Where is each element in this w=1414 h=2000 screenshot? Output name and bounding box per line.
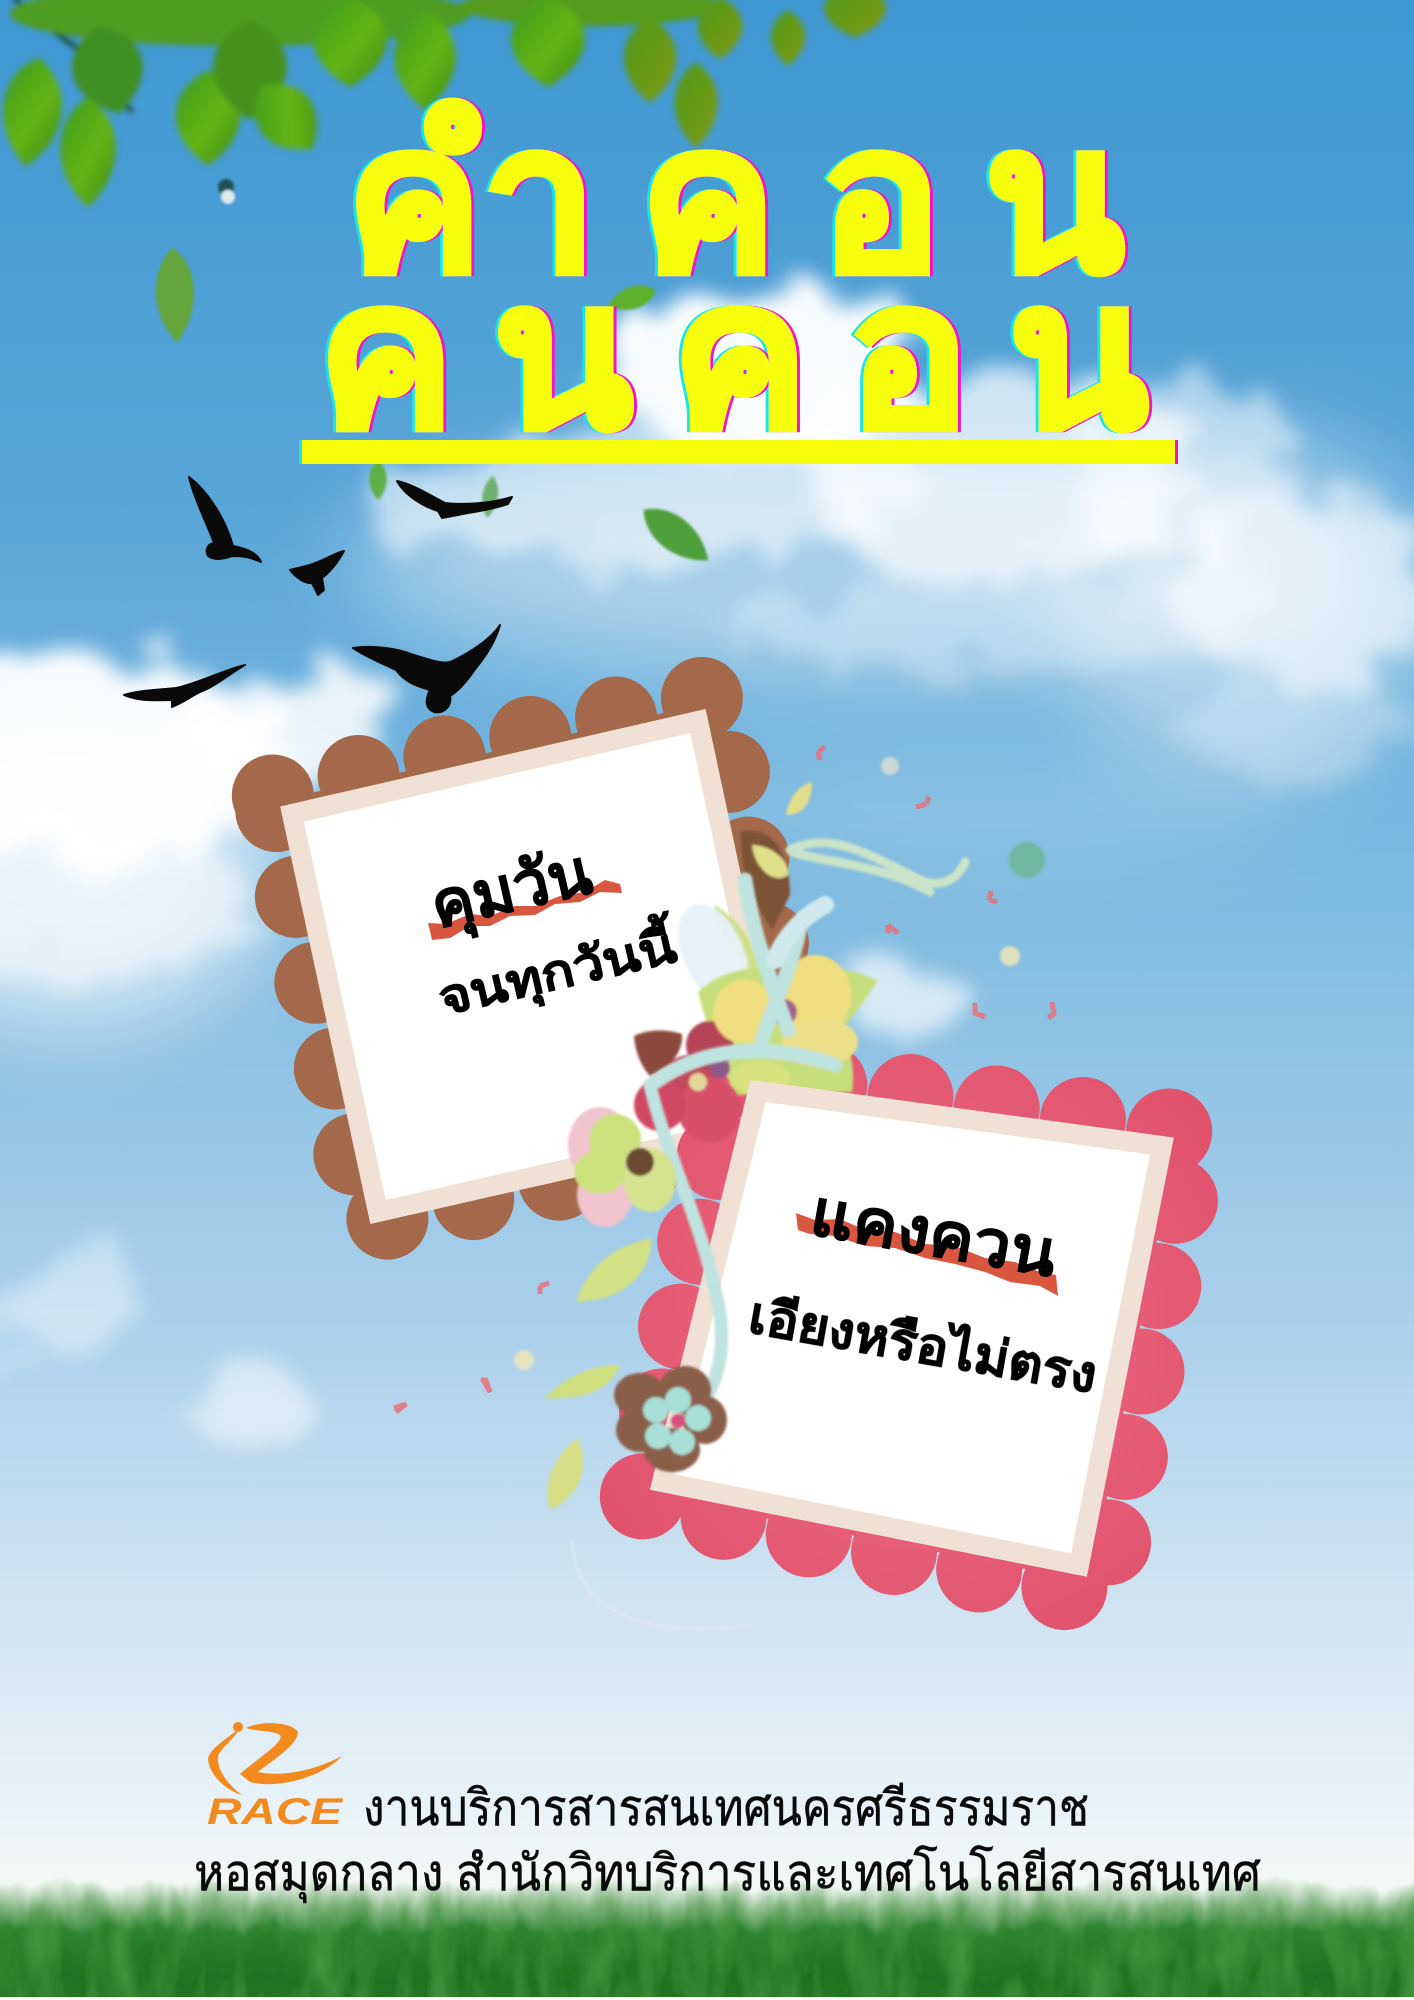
branch tip	[14, 0, 132, 112]
title underline	[302, 440, 1175, 464]
bird 1	[189, 477, 261, 562]
pale sparkles	[881, 757, 899, 775]
text: frame 2 heading: แคงควน	[805, 1176, 1062, 1290]
bird 4	[353, 625, 500, 712]
bird 5	[124, 665, 245, 707]
yellow leaf	[752, 845, 788, 878]
bottom edge	[0, 1997, 1414, 2000]
frame: pink card	[662, 1091, 1162, 1565]
hanging leaves	[0, 0, 886, 207]
confetti	[394, 747, 1054, 1412]
pink scallops	[642, 1074, 1188, 1594]
title line 2: คนคอน	[318, 242, 1148, 470]
green top leaf	[715, 905, 760, 975]
title line 1: คำคอน	[346, 86, 1124, 314]
yellow petal	[786, 782, 812, 815]
red flower	[634, 1021, 742, 1142]
logo wordmark: RACE	[207, 1791, 344, 1832]
red brush mark 2	[796, 1213, 1058, 1296]
brown mint flower	[614, 1366, 727, 1472]
green leaf 2	[544, 1365, 620, 1398]
text: frame 2 line: เอียงหรือไม่ตรง	[745, 1286, 1101, 1403]
brown leaf cluster	[740, 831, 790, 930]
brown frame card	[292, 721, 783, 1212]
ribbon bow	[655, 880, 835, 1082]
yellow flower	[713, 955, 858, 1095]
red brush mark 1	[428, 880, 622, 940]
frame: brown	[273, 696, 809, 1223]
water drop	[218, 179, 235, 204]
birds	[124, 477, 512, 712]
clouds	[0, 285, 1414, 1431]
bird 3	[290, 551, 344, 595]
grass	[0, 1882, 1414, 2000]
pink green flower	[568, 1107, 676, 1227]
yellow flower leaves	[698, 968, 878, 1095]
flowers lower	[544, 1107, 727, 1510]
flower cluster upper	[634, 831, 878, 1142]
green sparkle	[1009, 842, 1045, 878]
ribbon	[572, 843, 965, 1629]
green leaf 1	[576, 1238, 652, 1302]
cloud wash	[0, 430, 1414, 1020]
RACE logo	[207, 1722, 344, 1832]
green leaf 3	[547, 1438, 583, 1510]
logo swoosh	[208, 1722, 342, 1795]
ribbon long strand	[650, 1085, 722, 1415]
footer line 2: หอสมุดกลาง สำนักวิทบริการและเทศโนโลยีสารสนเทศ	[194, 1845, 1261, 1903]
brown scallops	[273, 696, 809, 1223]
title	[302, 86, 1175, 470]
ribbon head	[775, 905, 825, 960]
faint arc	[572, 1540, 755, 1629]
falling leaves	[154, 246, 719, 574]
white heart	[678, 904, 748, 1000]
sparkles	[514, 757, 1045, 1370]
footer line 1: งานบริการสารสนเทศนครศรีธรรมราช	[363, 1780, 1089, 1836]
text: frame 1 heading: คุมวัน	[424, 835, 599, 946]
text: frame 1 line: จนทุกวันนี้	[431, 910, 683, 1029]
ribbon tail	[790, 843, 965, 892]
bird 2	[397, 481, 512, 518]
